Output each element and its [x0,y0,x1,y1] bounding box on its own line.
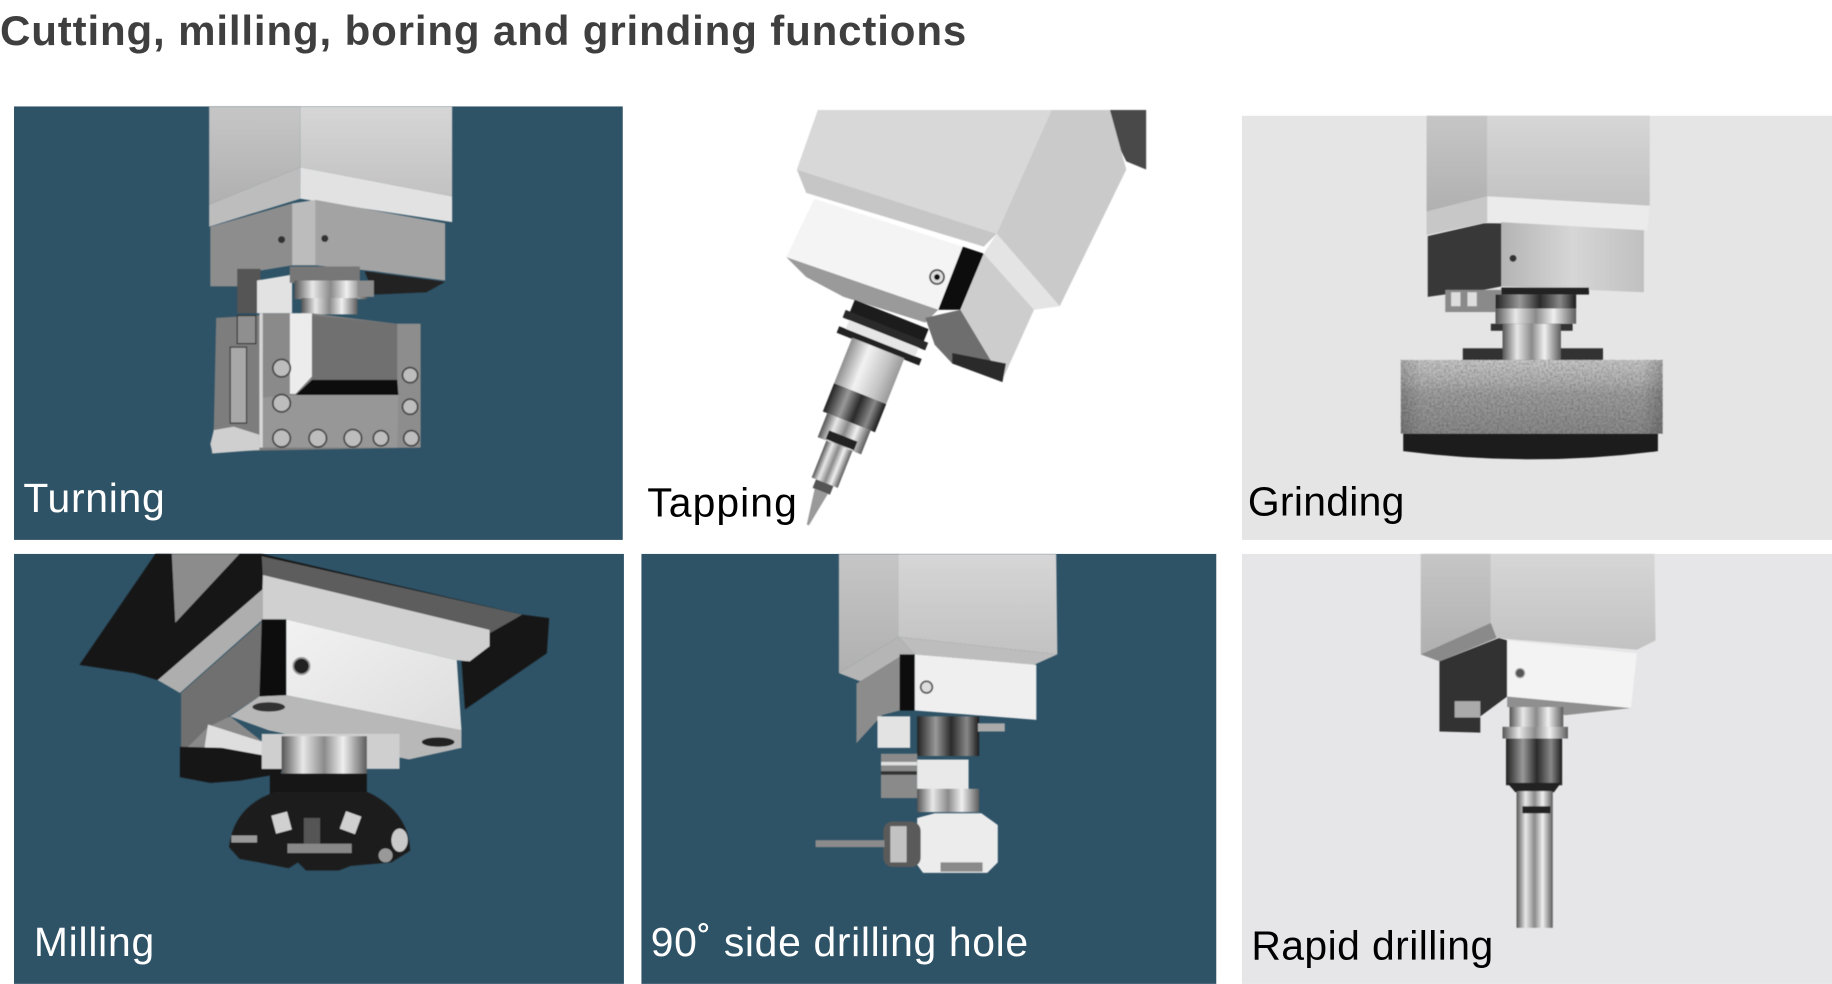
panel: milling [14,554,624,984]
label: tapping: Tapping [647,480,797,526]
image: side drilling attachment [816,554,1057,873]
label: side drilling: 90˚ side drilling hole [651,919,1028,965]
label: milling: Milling [34,919,154,965]
panel background: turning [14,106,623,540]
label: turning: Turning [23,475,165,521]
panel: turning [14,106,623,540]
label: grinding: Grinding [1248,478,1404,524]
panel: tapping [647,110,1146,541]
title: Cutting, milling, boring and grinding functions [0,7,966,54]
image: milling attachment [79,554,549,871]
panel: grinding [1242,116,1832,540]
image: grinding attachment [1401,116,1663,459]
panel: rapid drilling [1242,554,1832,984]
panel background: rapid drilling [1242,554,1832,984]
panel: 90 degree side drilling [641,554,1216,984]
label: rapid drilling: Rapid drilling [1251,922,1493,968]
panel background: milling [14,554,624,984]
image: tapping attachment [767,110,1146,541]
image: turning attachment [209,106,452,453]
panel background: grinding [1242,116,1832,540]
panel background: side drilling [641,554,1216,984]
image: rapid drilling attachment [1421,554,1656,928]
